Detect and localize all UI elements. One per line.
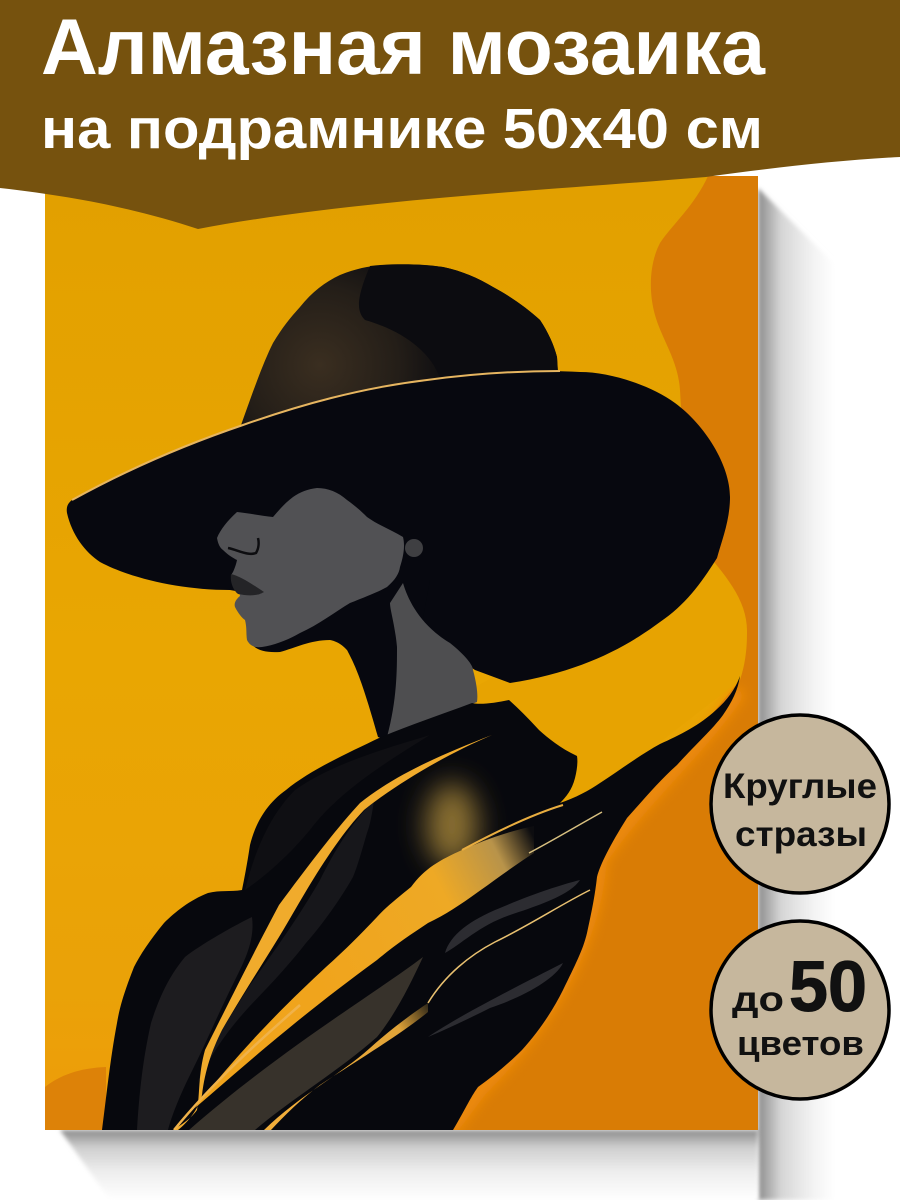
badge: round rhinestones bbox=[711, 715, 889, 893]
neck bbox=[387, 583, 477, 737]
lips bbox=[231, 574, 264, 595]
left drape bbox=[137, 917, 253, 1130]
painting: woman in a hat bbox=[45, 176, 758, 1130]
canvas shadow bbox=[60, 188, 835, 1200]
drape between bands bbox=[198, 800, 374, 1083]
hat gold rim line bbox=[72, 371, 560, 500]
badge: up to 50 colours: 50 bbox=[789, 948, 867, 1027]
subtitle: на подрамнике 50х40 см bbox=[41, 97, 763, 161]
thin leaf line bbox=[529, 812, 602, 853]
hat crown bbox=[240, 265, 558, 428]
thin line on right folds bbox=[428, 890, 590, 1003]
badge: round rhinestones: стразы bbox=[735, 815, 867, 854]
gold lower streak bbox=[264, 1003, 428, 1130]
badge: up to 50 colours bbox=[711, 921, 889, 1099]
body and shawl bbox=[102, 676, 740, 1130]
orange wave right bbox=[440, 176, 758, 1130]
hat brim bbox=[67, 371, 730, 683]
badge: up to 50 colours: до bbox=[732, 980, 784, 1019]
face bbox=[217, 488, 404, 647]
crown dark top section bbox=[359, 264, 558, 378]
gold leaf bbox=[195, 826, 534, 1108]
hatched grey-brown band bbox=[189, 957, 423, 1130]
painting background bbox=[45, 176, 758, 1130]
yellow ribbon bbox=[700, 562, 747, 680]
badge: up to 50 colours: цветов bbox=[737, 1025, 864, 1063]
thin gold streak to hem bbox=[174, 1005, 300, 1130]
title: Алмазная мозаика bbox=[41, 2, 766, 91]
badge: round rhinestones: Круглые bbox=[723, 767, 877, 806]
ear bbox=[405, 539, 423, 557]
top banner bbox=[0, 0, 900, 229]
shoulder drape bbox=[245, 735, 430, 890]
nostril bbox=[228, 538, 259, 554]
gold leaf top line bbox=[462, 805, 563, 850]
grey folds lower bbox=[428, 963, 563, 1037]
gold band left bbox=[174, 735, 492, 1130]
orange corner lower left bbox=[45, 1067, 106, 1130]
chest glow bbox=[426, 783, 478, 867]
bright orange edge glow bbox=[450, 690, 740, 1130]
shadow under chin bbox=[254, 610, 397, 738]
grey folds upper bbox=[445, 880, 580, 953]
